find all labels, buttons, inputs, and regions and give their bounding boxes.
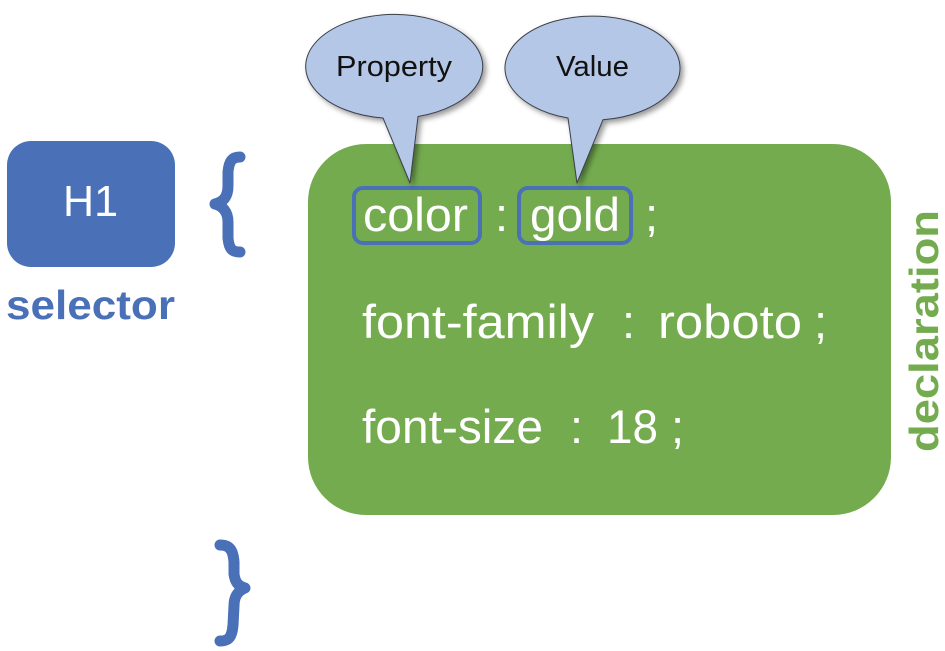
selector label: selector (6, 282, 175, 328)
opening brace (215, 157, 240, 252)
declaration line 1 (363, 188, 658, 241)
declaration line 2: font-family (362, 295, 595, 348)
declaration line 3: ; (671, 400, 684, 453)
closing brace (220, 545, 245, 641)
declaration line 1: : (495, 188, 508, 241)
selector box: H1 (63, 177, 118, 226)
declaration line 2: ; (814, 295, 827, 348)
declaration line 3: 18 (607, 400, 658, 453)
value highlight box (519, 188, 631, 243)
declaration line 1: gold (530, 188, 620, 241)
callout: Property: Property (336, 51, 453, 83)
declaration line 3: font-size (362, 400, 543, 453)
declaration line 1: ; (645, 188, 658, 241)
declaration line 2: : (622, 295, 635, 348)
callout: Property (306, 14, 483, 183)
declaration line 2 (362, 295, 827, 348)
declaration line 2: roboto (658, 295, 802, 348)
declaration panel (308, 144, 891, 515)
declaration line 3 (362, 400, 684, 453)
callout: Value (505, 16, 680, 183)
property highlight box (354, 188, 480, 243)
declaration line 1: color (363, 188, 468, 241)
selector box (7, 141, 175, 267)
callout: Value: Value (556, 51, 629, 83)
declaration line 3: : (570, 400, 583, 453)
